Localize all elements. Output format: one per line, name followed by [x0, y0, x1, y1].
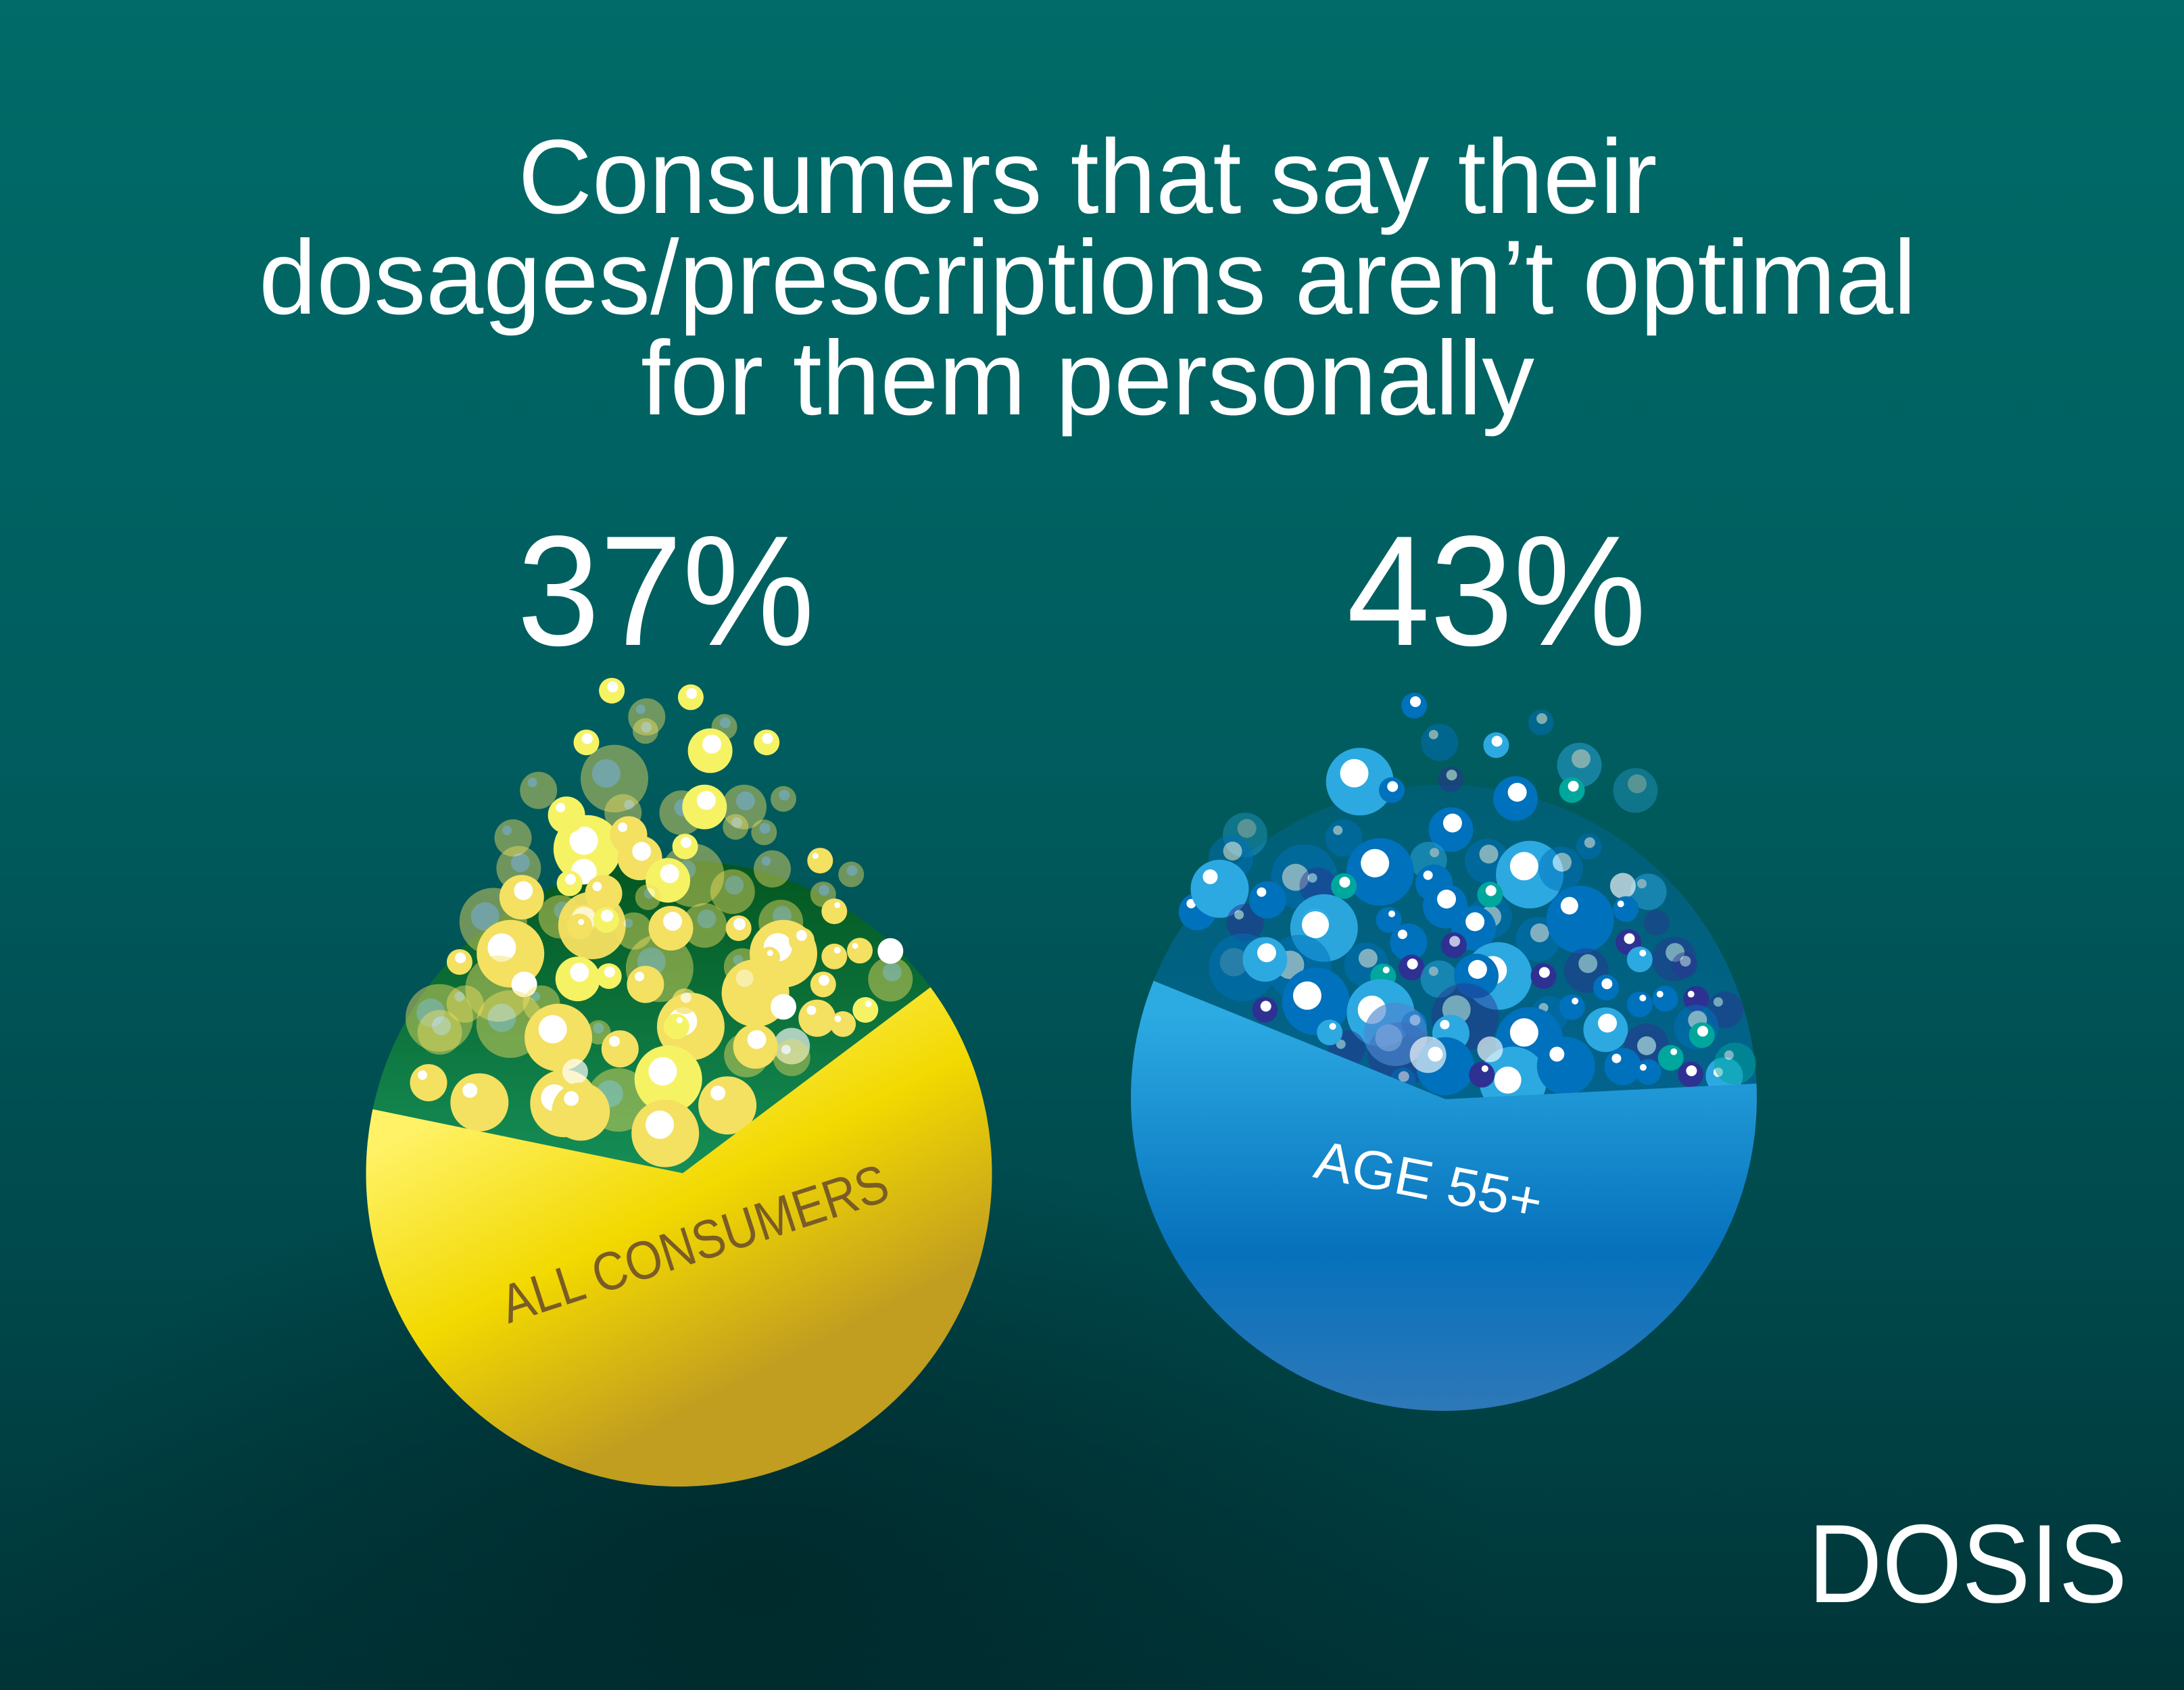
stat: age 55+ 43%: 43%	[1346, 504, 1647, 679]
title: Consumers that say their	[518, 118, 1657, 236]
bubbles: yellow pills	[406, 678, 913, 1167]
pill liquid: yellow wedge	[366, 987, 992, 1487]
pill liquid: blue wedge	[1131, 980, 1757, 1411]
pill dome: age 55+ background	[1131, 785, 1757, 1411]
label: all consumers: ALL CONSUMERS	[493, 1153, 896, 1334]
label: age 55+: AGE 55+	[1310, 1129, 1547, 1232]
pill dome: all consumers background	[366, 861, 992, 1487]
title	[259, 118, 1916, 437]
title: for them personally	[641, 320, 1534, 437]
bubbles: blue pills	[1179, 693, 1756, 1114]
title: dosages/prescriptions aren’t optimal	[259, 219, 1916, 337]
stat: all consumers 37%: 37%	[517, 504, 815, 679]
brand: DOSIS: DOSIS	[1808, 1501, 2127, 1626]
